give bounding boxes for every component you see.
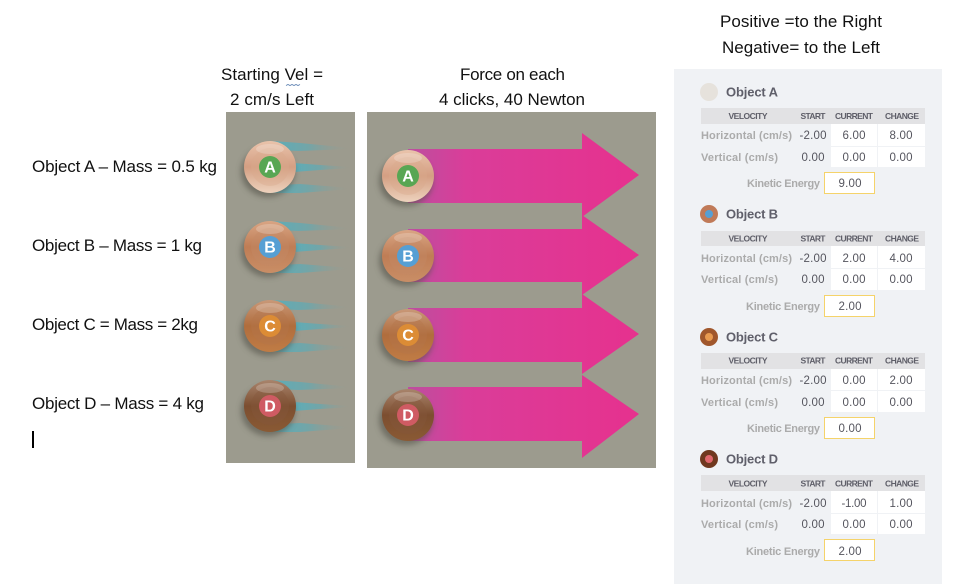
table: object B: Kinetic Energy [746, 301, 821, 313]
table: object B: 0.00 [842, 274, 866, 286]
table: object A: 0.00 [842, 152, 866, 164]
object B: B [402, 248, 414, 266]
object C with motion streaks [241, 300, 352, 356]
heading: force on each [439, 65, 585, 109]
table: object C: CHANGE [885, 356, 919, 366]
heading: sign convention: Positive =to the Right [720, 12, 882, 31]
table: object A: 0.00 [802, 152, 824, 164]
object A: A [402, 168, 414, 186]
heading: starting velocity: Starting Vel = [221, 65, 323, 84]
arrow D [408, 375, 639, 458]
table: object C: 0.00 [838, 423, 862, 435]
table: object A: START [800, 111, 826, 121]
table: object A: -2.00 [800, 130, 826, 142]
arrow A [408, 133, 639, 217]
mass labels: Object C = Mass = 2kg [32, 315, 198, 334]
object C: C [402, 328, 414, 344]
panel: starting velocity objects [226, 112, 355, 463]
table: object A: CURRENT [835, 111, 874, 121]
table: object D: -1.00 [842, 498, 866, 510]
heading: sign convention: Negative= to the Left [722, 38, 880, 57]
table: object B: 2.00 [838, 301, 862, 313]
object B [379, 230, 434, 286]
table: object D: CURRENT [835, 478, 874, 488]
table: object D [700, 450, 925, 560]
table: object C: Vertical (cm/s) [701, 397, 778, 409]
object B with motion streaks [241, 221, 352, 277]
table: object B: 2.00 [842, 253, 866, 265]
table: object C: CURRENT [835, 356, 874, 366]
table: object D: Horizontal (cm/s) [701, 498, 792, 510]
table: object B: 0.00 [890, 274, 912, 286]
table: object D: CHANGE [885, 478, 919, 488]
heading: starting velocity [221, 65, 323, 109]
table: object A: Kinetic Energy [747, 178, 821, 190]
table: object C: -2.00 [800, 375, 826, 387]
table: object D: Vertical (cm/s) [701, 519, 778, 531]
table: object B [700, 205, 925, 316]
mass labels: Object A – Mass = 0.5 kg [32, 157, 217, 176]
object D with motion streaks: D [264, 398, 276, 416]
object C with motion streaks: C [264, 318, 276, 336]
table: object C: 0.00 [842, 397, 866, 409]
table: object C: VELOCITY [728, 356, 768, 366]
object C [379, 309, 434, 365]
table: object A: CHANGE [885, 111, 919, 121]
table: object D: Kinetic Energy [746, 546, 821, 558]
table: object D: -2.00 [800, 498, 826, 510]
table: object A: 6.00 [842, 130, 866, 142]
table: object A: Horizontal (cm/s) [701, 130, 792, 142]
table: object C: Horizontal (cm/s) [701, 375, 792, 387]
table: object A: VELOCITY [728, 111, 768, 121]
object A with motion streaks: A [264, 160, 276, 176]
table: object B: Vertical (cm/s) [701, 274, 778, 286]
table: object D: Object D [726, 452, 778, 466]
heading: force on each: 4 clicks, 40 Newton [439, 90, 585, 109]
table: object B: Object B [726, 206, 778, 222]
table: object B: -2.00 [800, 253, 826, 265]
table: object B: Horizontal (cm/s) [701, 253, 792, 265]
table: object B: VELOCITY [728, 234, 768, 244]
table: object C: Object C [726, 330, 779, 344]
table: object D: START [800, 478, 826, 488]
object A with motion streaks [241, 141, 352, 197]
object D [379, 389, 434, 445]
mass labels: Object B – Mass = 1 kg [32, 236, 202, 255]
table: object B: CHANGE [885, 234, 919, 244]
arrow C [408, 294, 639, 374]
heading: starting velocity: 2 cm/s Left [230, 90, 314, 109]
table: object B: START [800, 234, 826, 244]
table: object C [700, 328, 925, 438]
object B with motion streaks: B [264, 240, 276, 256]
table: object D: 0.00 [890, 519, 912, 531]
table: object A: Object A [726, 84, 779, 100]
text cursor [32, 431, 34, 448]
panel: velocity and energy tables [674, 69, 942, 584]
table: object D: 0.00 [802, 519, 824, 531]
table: object C: 0.00 [890, 397, 912, 409]
table: object B: CURRENT [835, 234, 874, 244]
table: object A [700, 83, 925, 194]
object A [379, 150, 434, 206]
table: object C: 0.00 [842, 375, 866, 387]
panel: force arrows [367, 112, 656, 468]
mass labels [32, 157, 217, 413]
table: object D: VELOCITY [728, 478, 768, 488]
table: object A: Vertical (cm/s) [701, 152, 778, 164]
table: object C: 2.00 [890, 375, 912, 387]
table: object C: Kinetic Energy [747, 423, 821, 435]
table: object A: 9.00 [838, 178, 862, 190]
arrow B [408, 215, 639, 295]
table: object B: 0.00 [802, 274, 824, 286]
mass labels: Object D – Mass = 4 kg [32, 394, 204, 413]
table: object D: 1.00 [890, 498, 912, 510]
object D with motion streaks [241, 380, 352, 436]
table: object D: 2.00 [838, 546, 862, 558]
table: object A: 8.00 [890, 130, 912, 142]
table: object D: 0.00 [842, 519, 866, 531]
heading: force on each: Force on each [460, 65, 565, 84]
table: object C: 0.00 [802, 397, 824, 409]
heading: sign convention [720, 12, 882, 57]
table: object A: 0.00 [890, 152, 912, 164]
table: object B: 4.00 [890, 253, 912, 265]
table: object C: START [800, 356, 826, 366]
object D: D [402, 408, 414, 424]
